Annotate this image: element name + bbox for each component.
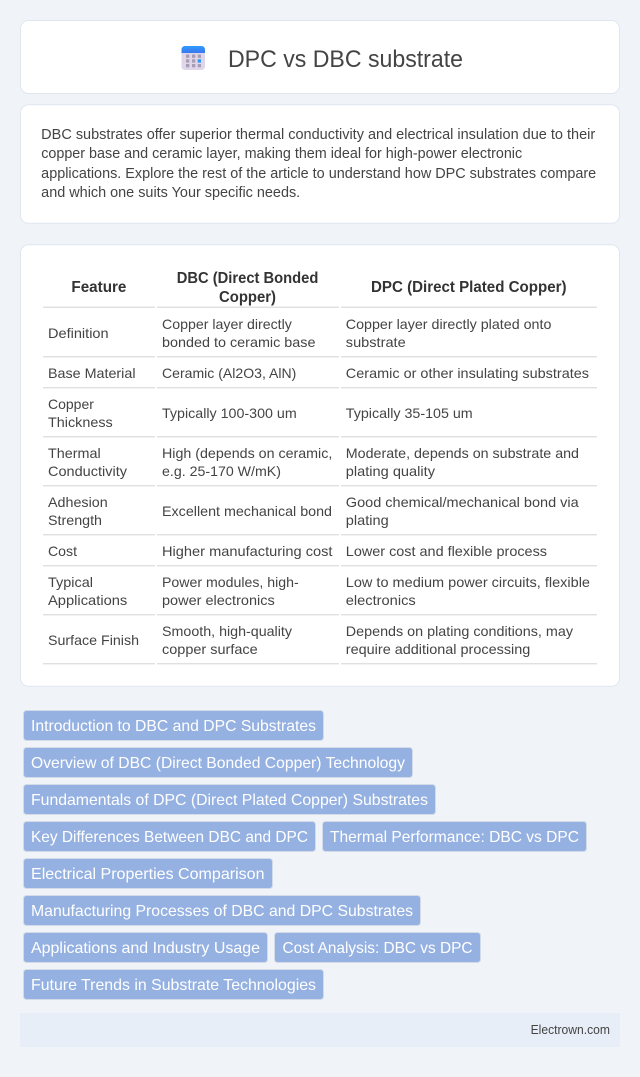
table row: Definition: Copper layer directly plated onto — [346, 316, 552, 332]
table row: Surface Finish: Depends on plating conditions, may — [346, 623, 573, 639]
table row: Typical Applications — [43, 574, 597, 615]
table row: Typical Applications: electronics — [346, 592, 416, 608]
table row: Adhesion Strength: plating — [346, 512, 389, 528]
table row: Thermal Conductivity: plating quality — [346, 463, 435, 479]
table row: Definition — [43, 316, 597, 357]
tag: Overview of DBC: Overview of DBC (Direct Bonded Copper) Technology — [31, 755, 405, 772]
panel: introduction text: applications. Explore the rest of the article to understand how DPC substrates compare — [41, 166, 596, 182]
table row: Typical Applications: Applications — [48, 592, 127, 608]
table row: Typical Applications: Low to medium power circuits, flexible — [346, 574, 590, 590]
tag: Manufacturing Processes — [24, 896, 420, 926]
tag: Thermal Performance: Thermal Performance: DBC vs DPC — [330, 829, 579, 846]
table row: Thermal Conductivity: e.g. 25-170 W/mK) — [162, 463, 281, 479]
table row: Base Material: Base Material — [48, 365, 136, 381]
table header row: DBC (Direct Bonded — [177, 270, 318, 287]
tag: Electrical Properties: Electrical Properties Comparison — [31, 866, 264, 883]
table row: Thermal Conductivity: High (depends on ceramic, — [162, 445, 332, 461]
tag: Cost Analysis: Cost Analysis: DBC vs DPC — [282, 940, 472, 957]
table row: Typical Applications: power electronics — [162, 592, 275, 608]
footer — [20, 1013, 620, 1047]
table row: Surface Finish — [43, 623, 597, 664]
tag: Fundamentals of DPC: Fundamentals of DPC (Direct Plated Copper) Substrates — [31, 792, 428, 809]
table row: Thermal Conductivity: Moderate, depends on substrate and — [346, 445, 579, 461]
table row: Copper Thickness: Thickness — [48, 414, 113, 430]
icon: calendar grid — [182, 46, 205, 70]
table header row: Copper) — [219, 289, 276, 306]
table row: Copper Thickness — [43, 396, 597, 437]
tag: Introduction: Introduction to DBC and DPC Substrates — [31, 718, 316, 735]
tag: Fundamentals of DPC — [24, 784, 436, 814]
table row: Thermal Conductivity — [43, 445, 597, 486]
table row: Adhesion Strength: Strength — [48, 512, 102, 528]
tag: Thermal Performance — [322, 822, 586, 852]
table row: Surface Finish: copper surface — [162, 641, 258, 657]
table row: Base Material — [43, 365, 597, 388]
table row: Copper Thickness: Typically 100-300 um — [162, 405, 297, 421]
table row: Definition: Definition — [48, 325, 109, 341]
table row: Base Material: Ceramic (Al2O3, AlN) — [162, 365, 296, 381]
table row: Cost — [43, 543, 597, 566]
table row: Cost: Lower cost and flexible process — [346, 543, 547, 559]
table row: Typical Applications: Power modules, high- — [162, 574, 299, 590]
table row: Copper Thickness: Copper — [48, 396, 94, 412]
tag: Overview of DBC — [24, 748, 412, 778]
table row: Surface Finish: Smooth, high-quality — [162, 623, 292, 639]
topic tags — [24, 710, 586, 1000]
table row: Adhesion Strength: Excellent mechanical bond — [162, 503, 332, 519]
tag: Key Differences — [24, 822, 316, 852]
table row: Copper Thickness: Typically 35-105 um — [346, 405, 473, 421]
table row: Thermal Conductivity: Conductivity — [48, 463, 127, 479]
tag: Applications: Applications and Industry Usage — [31, 940, 260, 957]
tag: Applications — [24, 932, 268, 962]
table row: Adhesion Strength: Adhesion — [48, 494, 108, 510]
table row: Surface Finish: Surface Finish — [48, 632, 139, 648]
table row: Thermal Conductivity: Thermal — [48, 445, 101, 461]
panel: introduction text: copper base and ceramic layer, making them ideal for high-power electronic — [41, 146, 522, 162]
tag: Electrical Properties — [24, 858, 272, 888]
tag: Future Trends: Future Trends in Substrate Technologies — [31, 977, 316, 994]
panel: introduction text — [20, 105, 620, 223]
footer: Electrown.com — [531, 1023, 610, 1037]
table row: Typical Applications: Typical — [48, 574, 93, 590]
panel: introduction text: DBC substrates offer superior thermal conductivity and electrical insulation due to their — [41, 127, 595, 143]
tag: Cost Analysis — [274, 932, 480, 962]
panel: introduction text: and which one suits Your specific needs. — [41, 185, 300, 201]
table row: Definition: substrate — [346, 334, 406, 350]
panel: comparison table — [20, 245, 620, 686]
table row: Adhesion Strength: Good chemical/mechanical bond via — [346, 494, 579, 510]
title: DPC vs DBC substrate — [228, 46, 463, 73]
table row: Definition: bonded to ceramic base — [162, 334, 316, 350]
table row: Cost: Cost — [48, 543, 77, 559]
tag: Key Differences: Key Differences Between DBC and DPC — [31, 829, 308, 846]
tag: Future Trends — [24, 970, 324, 1000]
table row: Definition: Copper layer directly — [162, 316, 292, 332]
tag: Introduction — [24, 710, 324, 740]
table row: Adhesion Strength — [43, 494, 597, 535]
panel: title card — [20, 20, 620, 94]
table header row — [43, 270, 597, 308]
table header row: Feature — [71, 279, 126, 296]
tag: Manufacturing Processes: Manufacturing Processes of DBC and DPC Substrates — [31, 903, 413, 920]
table header row: DPC (Direct Plated Copper) — [371, 279, 566, 296]
table row: Cost: Higher manufacturing cost — [162, 543, 333, 559]
table row: Base Material: Ceramic or other insulating substrates — [346, 365, 589, 381]
table row: Surface Finish: require additional processing — [346, 641, 530, 657]
